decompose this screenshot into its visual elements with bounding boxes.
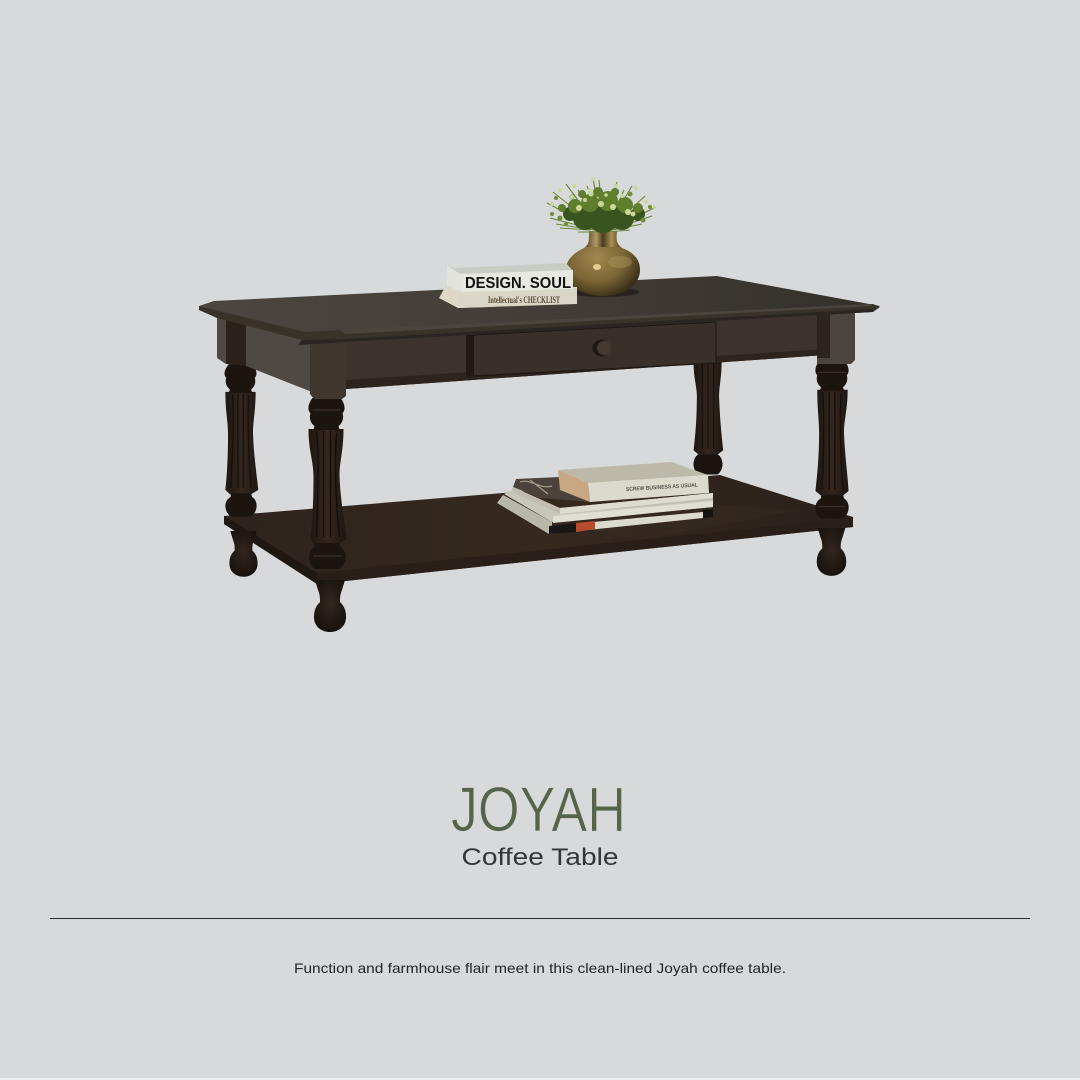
drawer with knob [466,321,716,377]
description text: Function and farmhouse flair meet in this clean-lined Joyah coffee table. [294,960,786,976]
front right foot [817,528,846,576]
front left leg [308,398,346,569]
subtitle: Coffee Table: Coffee Table [462,844,618,871]
apron and corner posts [217,308,855,399]
book: Screw Business As Usual [558,462,709,502]
table top [199,276,880,345]
divider line [50,918,1030,919]
plant with white flowers [547,177,656,233]
upper books: Design. Soul and Checklist [439,263,577,308]
lower shelf [224,475,853,584]
book title: Design. Soul: DESIGN. SOUL [465,275,571,292]
product photo: coffee table [199,177,880,632]
back right leg [694,338,723,474]
back left leg [225,364,258,517]
brass vase [566,231,640,297]
drawer knob [592,340,611,356]
title: JOYAH: JOYAH [451,775,626,845]
back left foot [229,531,258,577]
lower stack of books and magazines [497,462,713,534]
bottom edge strip [0,1078,1080,1080]
book: Screw Business As Usual: SCREW BUSINESS AS USUAL [626,483,699,493]
book title: Checklist: Intellectual's CHECKLIST [488,295,560,305]
front left foot [314,580,346,632]
front right leg [815,361,849,519]
